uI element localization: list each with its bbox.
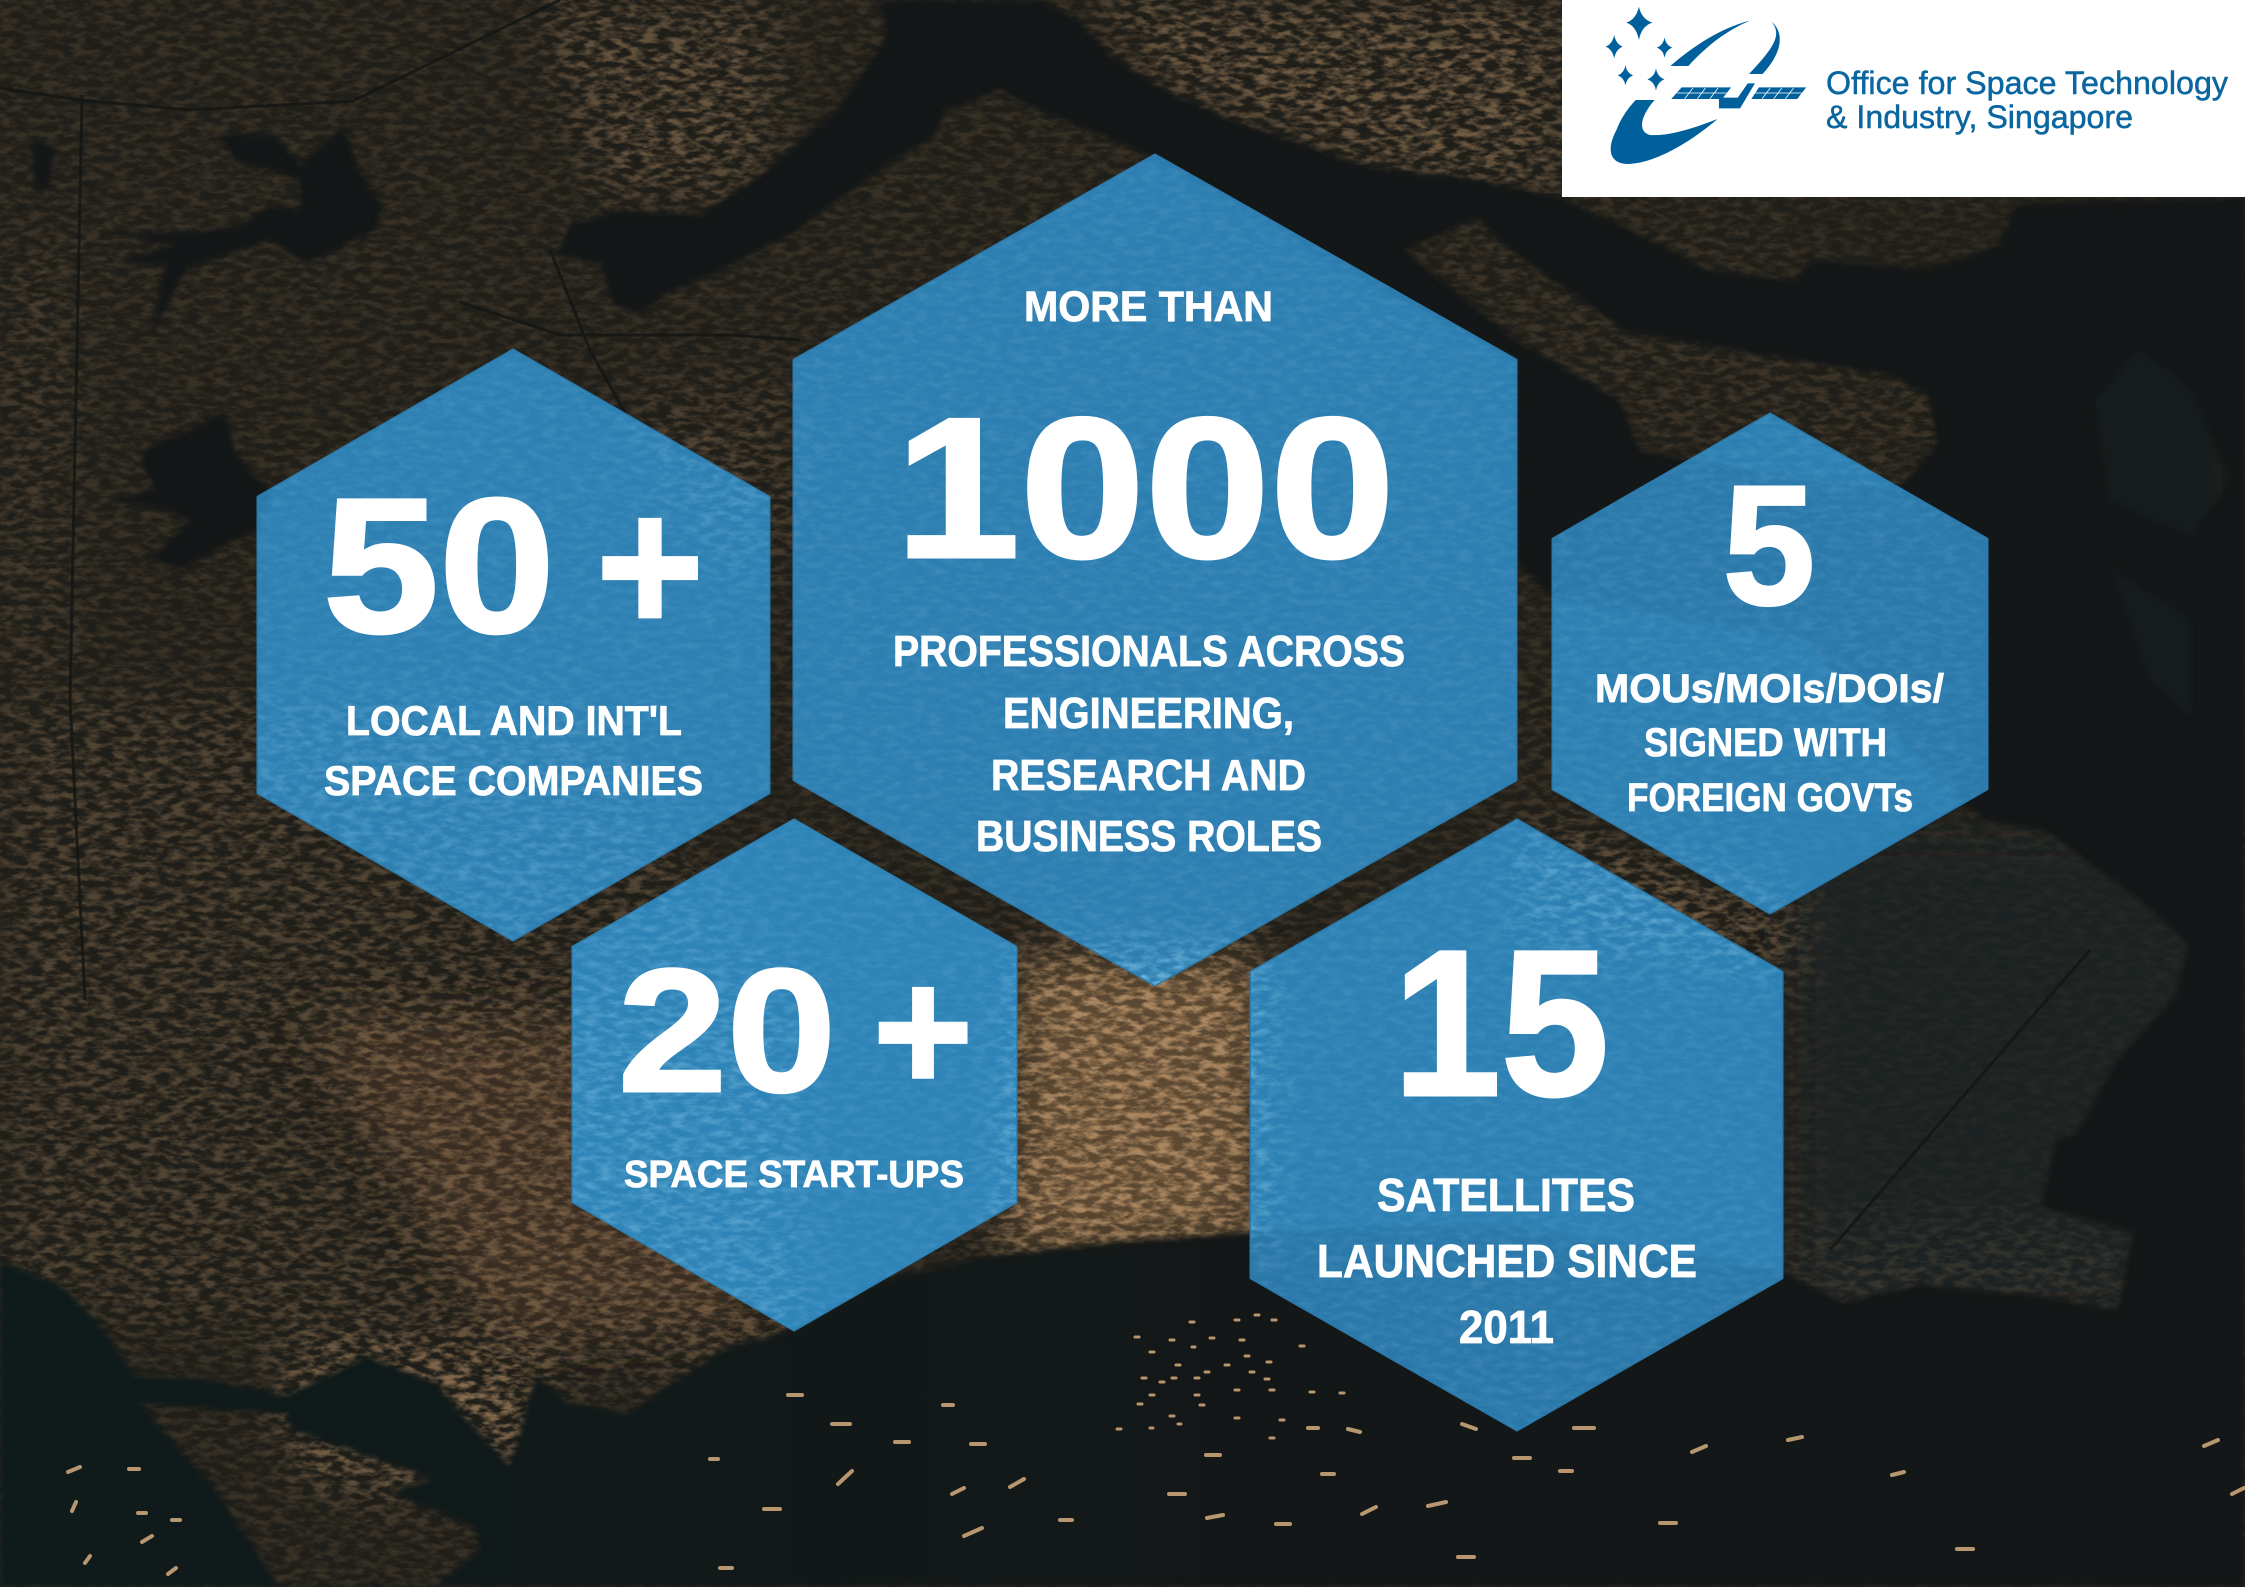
caption line 3: FOREIGN GOVTs	[1627, 776, 1913, 820]
caption line 3: RESEARCH AND	[991, 751, 1306, 800]
caption line 1: SATELLITES	[1377, 1169, 1635, 1221]
icon: stars, orbit and satellite	[1606, 7, 1806, 164]
hexagon shape	[1553, 414, 1987, 913]
caption line 2: SIGNED WITH	[1644, 721, 1887, 765]
caption line 2: ENGINEERING,	[1003, 689, 1294, 738]
plus sign: +	[873, 934, 973, 1129]
intro label: MORE THAN	[1024, 283, 1273, 331]
logo text line 2: & Industry, Singapore	[1826, 99, 2133, 135]
hexagon panel: 15 satellites launched since 2011	[1251, 820, 1782, 1430]
hexagon panel: 5 MOUs signed with foreign governments	[1553, 414, 1987, 913]
caption line 4: BUSINESS ROLES	[976, 812, 1322, 861]
big number 20: 20	[618, 934, 836, 1129]
logo text line 1: Office for Space Technology	[1826, 65, 2228, 101]
hexagon shape	[1251, 820, 1782, 1430]
hexagon panel: 20+ space start-ups	[573, 820, 1016, 1330]
big number: 5	[1723, 451, 1815, 641]
caption line 3: 2011	[1459, 1301, 1554, 1353]
hexagon shape	[258, 350, 769, 940]
big number 50: 50	[323, 458, 555, 673]
caption line 2: SPACE COMPANIES	[324, 757, 703, 804]
hexagon panel: 50+ local and international space companies	[258, 350, 769, 940]
caption line 1: PROFESSIONALS ACROSS	[893, 627, 1405, 676]
big number: 15	[1393, 908, 1609, 1140]
caption line 1: MOUs/MOIs/DOIs/	[1595, 667, 1944, 711]
plus sign: +	[596, 458, 704, 673]
hexagon shape	[573, 820, 1016, 1330]
logo panel: Office for Space Technology & Industry	[1562, 0, 2245, 197]
caption: SPACE START-UPS	[624, 1154, 964, 1196]
caption line 1: LOCAL AND INT'L	[346, 697, 682, 744]
caption line 2: LAUNCHED SINCE	[1317, 1235, 1697, 1287]
hexagon panel: more than 1000 professionals	[794, 155, 1516, 985]
hexagon shape	[794, 155, 1516, 985]
big number: 1000	[895, 377, 1395, 600]
